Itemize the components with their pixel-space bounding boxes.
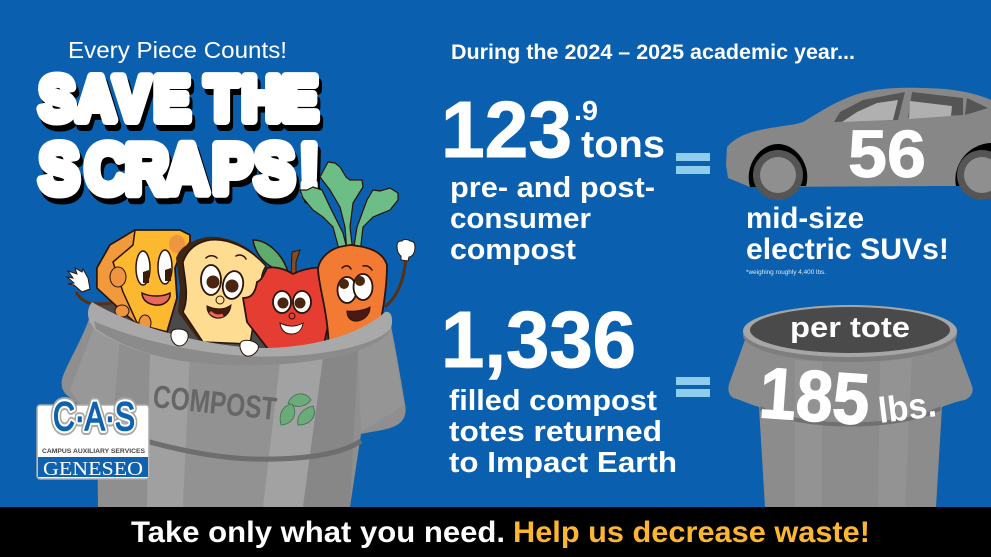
car wheels xyxy=(749,143,991,200)
icon: recycling leaves xyxy=(280,394,314,425)
title: save the scraps xyxy=(39,65,322,214)
text: filled compost totes: to Impact Earth xyxy=(449,447,677,479)
logo: CAS Geneseo: C·A·S xyxy=(53,395,135,439)
character: bread xyxy=(176,237,266,344)
title: save the scraps: SCRAPS! xyxy=(39,130,319,208)
footnote: *weighing roughly 4,400 lbs. xyxy=(746,270,826,276)
logo: CAS Geneseo: CAMPUS AUXILIARY SERVICES xyxy=(42,448,145,455)
icon: equals sign bottom xyxy=(676,377,710,397)
tagline: Every Piece Counts! xyxy=(68,37,287,63)
stat: 185 lbs: 185 xyxy=(757,353,872,441)
bin rim xyxy=(88,302,392,366)
text: mid-size electric SUVs xyxy=(746,202,949,266)
title: save the scraps: SCRAPS! xyxy=(42,136,322,214)
logo: CAS Geneseo: C·A·S xyxy=(53,395,135,439)
stat: 123.9 tons: 123 xyxy=(441,85,572,174)
icon: waving glove xyxy=(67,268,90,292)
title: save the scraps: SAVETHE xyxy=(42,71,321,140)
bin label: compost: COMPOST xyxy=(151,378,279,427)
illustration: compost bin xyxy=(62,302,406,507)
footer bar: Help us decrease waste! xyxy=(513,516,870,549)
text: filled compost totes: totes returned xyxy=(449,416,662,448)
illustration: tote xyxy=(728,305,973,507)
footer bar: Take only what you need. xyxy=(131,516,505,549)
tote rim xyxy=(743,308,957,362)
heading: academic year: During the 2024 – 2025 academic year... xyxy=(451,41,855,64)
icon: lower gloves xyxy=(171,329,258,356)
stat: 185 lbs xyxy=(757,353,939,441)
icon: raised fist glove xyxy=(397,240,415,261)
character: carrot xyxy=(300,162,406,350)
text: pre- and post-consumer compost: pre- and post- xyxy=(450,172,655,204)
text: pre- and post-consumer compost xyxy=(450,172,655,266)
logo: CAS Geneseo xyxy=(37,395,149,480)
text: per tote: per tote xyxy=(790,312,910,344)
stat: 56: 56 xyxy=(848,117,926,192)
logo: CAS Geneseo: GENESEO xyxy=(43,458,143,480)
stat: 123.9 tons xyxy=(441,85,665,174)
text: filled compost totes: filled compost xyxy=(449,385,657,417)
stat: 1,336: 1,336 xyxy=(441,295,636,384)
text: pre- and post-consumer compost: consumer xyxy=(450,203,591,235)
bin band xyxy=(98,425,361,459)
illustration: car xyxy=(726,88,991,200)
title: save the scraps: SAVETHE xyxy=(39,65,318,134)
text: filled compost totes xyxy=(449,385,677,479)
stat: 123.9 tons: tons xyxy=(581,124,665,166)
carrot leaves xyxy=(300,162,398,253)
text: mid-size electric SUVs: electric SUVs! xyxy=(746,233,949,266)
text: pre- and post-consumer compost: compost xyxy=(450,234,576,266)
icon: equals sign top xyxy=(676,153,710,174)
bin interior xyxy=(92,300,385,348)
text: mid-size electric SUVs: mid-size xyxy=(746,202,864,235)
illustration: food characters xyxy=(67,162,415,350)
stat: 185 lbs: lbs. xyxy=(876,383,939,431)
character: apple xyxy=(243,240,329,349)
character: cheese xyxy=(76,230,190,332)
footer bar xyxy=(0,507,991,557)
stat: 123.9 tons: .9 xyxy=(574,95,598,126)
logo: CAS Geneseo: C·A·S xyxy=(53,395,135,439)
